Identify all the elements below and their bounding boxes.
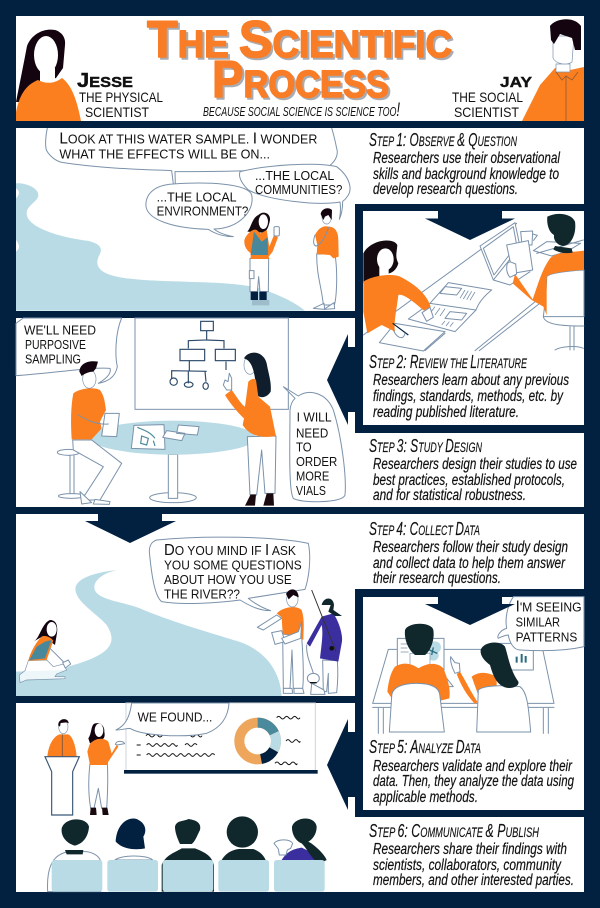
panel: step 5 scene and text bbox=[363, 597, 584, 810]
label: the social scientist bbox=[452, 89, 523, 120]
step 5 text: STEP 5: ANALYZE DATA bbox=[369, 737, 481, 757]
scene: observing the river bbox=[16, 128, 350, 311]
step 6 text bbox=[369, 821, 574, 889]
step 1 text: STEP 1: OBSERVE & QUESTION bbox=[369, 130, 517, 150]
step 4 text: their research questions. bbox=[373, 570, 501, 587]
figure: Jay thinking bbox=[313, 208, 339, 309]
step 2 text: reading published literature. bbox=[373, 404, 519, 421]
panel: step 3 scene and text bbox=[16, 318, 584, 507]
speech bubble: order more vials: ORDER bbox=[296, 455, 337, 469]
figure: Jesse taking notes bbox=[363, 240, 445, 351]
speech bubble: purposive sampling: SAMPLING bbox=[25, 352, 81, 366]
title: PROCESS bbox=[214, 53, 391, 111]
title bbox=[147, 11, 454, 111]
speech bubble: asking questions: THE RIVER?? bbox=[164, 587, 240, 601]
presentation screen bbox=[124, 703, 318, 774]
speech bubble: local communities: ...THE LOCAL bbox=[255, 169, 334, 183]
speech bubble: similar patterns: PATTERNS bbox=[516, 631, 577, 645]
speech bubble: order more vials: TO bbox=[296, 441, 312, 455]
panel: step 1 scene and text bbox=[16, 128, 584, 311]
step 3 text: STEP 3: STUDY DESIGN bbox=[369, 436, 482, 456]
step 3 text bbox=[369, 436, 577, 504]
step 5 text bbox=[369, 737, 574, 806]
speech bubble: we found bbox=[116, 703, 229, 736]
speech bubble: water sample: WHAT THE EFFECTS WILL BE ON... bbox=[59, 147, 270, 161]
speech bubble: order more vials: VIALS bbox=[296, 484, 326, 498]
arrow: left to step 6 bbox=[327, 719, 355, 810]
step 4 text bbox=[369, 519, 568, 587]
figure: community member with dog bbox=[307, 590, 342, 694]
audience member 2 bbox=[107, 819, 158, 892]
figure: Jay at table bbox=[57, 361, 122, 504]
speech bubble: local environment: ...THE LOCAL bbox=[157, 191, 237, 205]
label: the social scientist: SCIENTIST bbox=[454, 104, 519, 120]
step 2 text bbox=[369, 352, 569, 421]
figure: Jesse at whiteboard bbox=[223, 353, 276, 506]
figure: Jesse kneeling bbox=[19, 620, 71, 683]
panel: header bbox=[16, 11, 584, 121]
label: the social scientist: THE SOCIAL bbox=[452, 89, 523, 105]
speech bubble: local environment: ENVIRONMENT? bbox=[157, 205, 248, 219]
label: the physical scientist bbox=[79, 89, 163, 120]
figure: Jay portrait bbox=[522, 19, 584, 121]
speech bubble: similar patterns: I'M SEEING bbox=[516, 599, 582, 616]
scene: presenting findings bbox=[45, 703, 327, 892]
figure: Jay from behind bbox=[387, 624, 450, 732]
audience bbox=[48, 816, 327, 892]
scene: reviewing literature bbox=[363, 214, 584, 351]
audience member 3 bbox=[162, 819, 214, 892]
title: THE SCIENTIFIC bbox=[147, 11, 452, 69]
panel: step 4 scene and text bbox=[16, 514, 584, 696]
figure: Jesse sampling bbox=[244, 213, 279, 305]
speech bubble: order more vials: MORE bbox=[296, 470, 329, 484]
speech bubble: water sample: LOOK AT THIS WATER SAMPLE. I WONDER bbox=[59, 130, 317, 147]
speech bubble: local communities bbox=[240, 164, 350, 219]
figure: Jay interviewing bbox=[257, 589, 304, 693]
figure: Jay reading bbox=[507, 214, 584, 350]
tagline: BECAUSE SOCIAL SCIENCE IS SCIENCE TOO! bbox=[203, 100, 400, 121]
step 3 text: and for statistical robustness. bbox=[373, 487, 526, 504]
donut chart bbox=[239, 723, 276, 759]
speech bubble: asking questions bbox=[149, 537, 310, 611]
label: Jesse name: JESSE bbox=[77, 70, 133, 92]
audience member 1 bbox=[48, 819, 102, 892]
speech bubble: similar patterns bbox=[498, 597, 584, 651]
speech bubble: purposive sampling: WE'LL NEED bbox=[24, 323, 96, 337]
scene: analyzing data bbox=[373, 597, 584, 733]
speech bubble: purposive sampling bbox=[16, 318, 122, 383]
speech bubble: order more vials: NEED bbox=[296, 426, 328, 440]
table bbox=[90, 421, 256, 503]
desk with screens bbox=[373, 638, 554, 733]
speech bubble: asking questions: ABOUT HOW YOU USE bbox=[164, 573, 292, 587]
panel: step 2 scene and text bbox=[363, 211, 584, 425]
speech bubble: local communities: COMMUNITIES? bbox=[255, 183, 342, 197]
step 5 text: applicable methods. bbox=[373, 789, 478, 806]
speech bubble: purposive sampling: PURPOSIVE bbox=[25, 338, 86, 352]
step 2 text: STEP 2: REVIEW THE LITERATURE bbox=[369, 352, 528, 372]
label: Jay name: JAY bbox=[500, 74, 532, 91]
audience member 4 bbox=[218, 816, 269, 892]
speech bubble: order more vials bbox=[283, 387, 345, 502]
speech bubble: order more vials: I WILL bbox=[297, 411, 332, 425]
speech bubble: water sample bbox=[46, 128, 337, 184]
panel: step 6 scene and text bbox=[16, 703, 584, 892]
scene: collecting data bbox=[16, 537, 342, 696]
arrow: down to step 5 bbox=[425, 597, 515, 625]
open journal bbox=[408, 283, 492, 332]
figure: Jesse portrait bbox=[16, 30, 81, 121]
desk bbox=[363, 223, 583, 351]
speech bubble: asking questions: YOU SOME QUESTIONS bbox=[164, 558, 302, 572]
audience member 5 with dog bbox=[274, 819, 327, 892]
scene: study design meeting bbox=[16, 318, 345, 506]
label: the physical scientist: THE PHYSICAL bbox=[79, 89, 163, 105]
figure: Jay at podium bbox=[45, 719, 79, 815]
label: the physical scientist: SCIENTIST bbox=[85, 104, 149, 120]
speech bubble: we found: WE FOUND... bbox=[138, 711, 212, 725]
laptop and mug bbox=[480, 223, 581, 285]
whiteboard with flowchart bbox=[135, 318, 288, 409]
speech bubble: similar patterns: SIMILAR bbox=[516, 616, 560, 630]
river bbox=[16, 183, 305, 311]
step 6 text: STEP 6: COMMUNICATE & PUBLISH bbox=[369, 821, 539, 841]
speech bubble: local environment bbox=[146, 183, 252, 237]
title: THE SCIENTIFIC bbox=[149, 13, 454, 71]
speech bubble: asking questions: DO YOU MIND IF I ASK bbox=[164, 542, 297, 559]
figure: Jesse presenting bbox=[87, 723, 125, 815]
arrow: down to step 4 bbox=[85, 514, 176, 543]
step 1 text bbox=[369, 130, 560, 198]
title: PROCESS bbox=[212, 51, 389, 109]
step 4 text: STEP 4: COLLECT DATA bbox=[369, 519, 480, 539]
step 1 text: develop research questions. bbox=[373, 181, 518, 198]
figure: Jesse pointing bbox=[451, 643, 531, 732]
arrow: left to step 3 bbox=[327, 334, 355, 425]
river bbox=[16, 570, 282, 696]
arrow: down to step 2 bbox=[425, 211, 515, 240]
